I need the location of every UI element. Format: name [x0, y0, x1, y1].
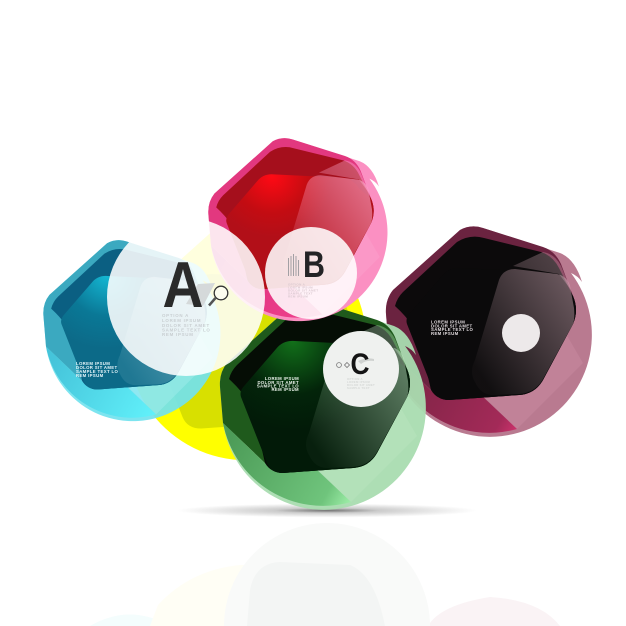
text block: option B: REM IPSUM	[288, 294, 308, 298]
panel: maroon blob	[386, 226, 592, 437]
label A group	[162, 248, 228, 321]
panel: yellow blob	[127, 225, 366, 460]
text block: option B: SAMPLE TEXT	[288, 292, 313, 296]
text block: blue: DOLOR SIT AMET	[76, 365, 118, 370]
text block: maroon	[431, 320, 473, 336]
circle A	[107, 218, 265, 376]
text block: green: SAMPLE TEXT LO	[257, 384, 299, 388]
letter B: B	[303, 244, 325, 285]
panel: blue blob	[43, 240, 220, 421]
text block: option A: REM IPSUM	[162, 332, 194, 337]
circle B	[265, 227, 357, 319]
text block: green: REM IPSUM	[271, 387, 299, 392]
circle C	[323, 331, 399, 407]
circle D	[502, 314, 540, 352]
text block: option A: OPTION A	[162, 313, 189, 318]
icon: circle and diamond	[337, 362, 350, 368]
text block: option C: OPTION A	[347, 377, 363, 381]
label B group	[288, 244, 325, 285]
text block: blue	[76, 361, 118, 378]
text block: blue: SAMPLE TEXT LO	[76, 369, 118, 374]
text block: option C: SAMPLE TEXT	[347, 386, 370, 390]
text block: maroon: DOLOR SIT AMET	[431, 323, 473, 328]
floor reflection	[90, 523, 560, 626]
label C group	[337, 348, 374, 381]
ground shadow	[177, 504, 477, 518]
panel: green blob	[220, 299, 426, 510]
text block: maroon: LOREM IPSUM	[431, 320, 465, 324]
panel: red blob	[208, 138, 387, 321]
text block: maroon: REM IPSUM	[431, 331, 459, 336]
text block: option B	[288, 282, 318, 298]
text block: blue: REM IPSUM	[76, 373, 104, 378]
text block: green: DOLOR SIT AMET	[257, 380, 299, 385]
icon: magnifier	[209, 286, 228, 306]
text block: option C: DOLOR SIT AMET	[347, 383, 375, 387]
text block: green	[257, 376, 299, 392]
text block: option A: SAMPLE TEXT LO	[162, 328, 211, 332]
text block: blue: LOREM IPSUM	[76, 361, 110, 366]
text block: option B: OPTION A	[288, 282, 306, 286]
text block: maroon: SAMPLE TEXT LO	[431, 327, 473, 332]
letter A: A	[162, 248, 204, 321]
icon: bars	[288, 254, 298, 276]
text block: option B: LOREM IPSUM	[288, 286, 313, 290]
text block: option C	[347, 377, 375, 390]
letter C: C	[350, 348, 370, 381]
text block: green: LOREM IPSUM	[265, 376, 299, 381]
text block: option A	[162, 313, 211, 337]
text block: option C: LOREM IPSUM	[347, 380, 370, 384]
text block: option A: LOREM IPSUM	[162, 318, 201, 323]
text block: option A: DOLOR SIT AMET	[162, 323, 210, 328]
text block: option B: DOLOR SIT AMET	[288, 288, 318, 292]
